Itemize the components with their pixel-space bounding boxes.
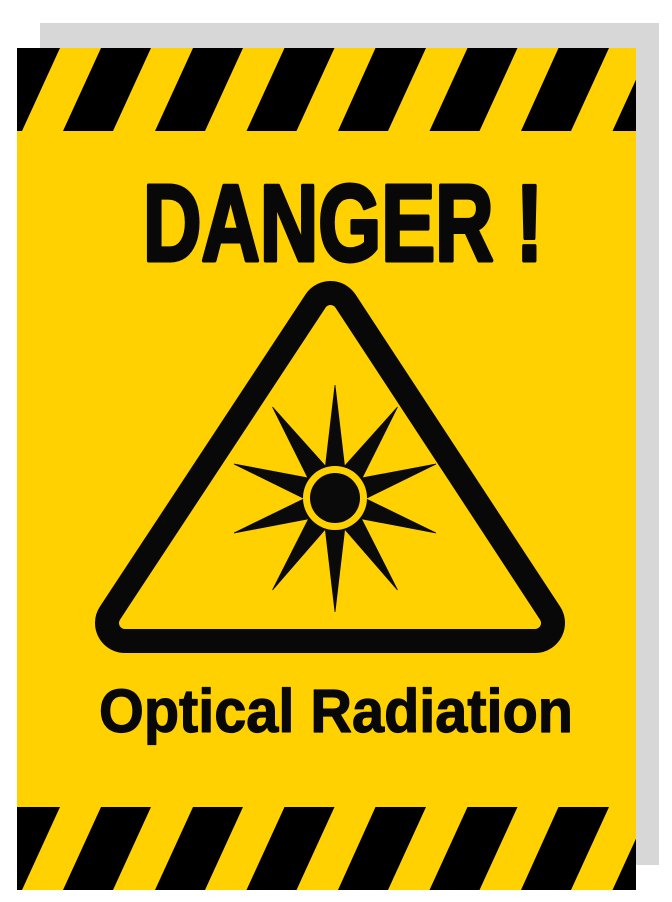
bottom hazard stripes — [0, 807, 672, 890]
title: DANGER !: DANGER ! — [143, 162, 543, 284]
icon: optical radiation starburst — [234, 385, 436, 612]
subtitle: Optical Radiation: Optical Radiation — [99, 677, 573, 745]
warning triangle icon — [125, 311, 535, 623]
top hazard stripes — [0, 48, 672, 131]
